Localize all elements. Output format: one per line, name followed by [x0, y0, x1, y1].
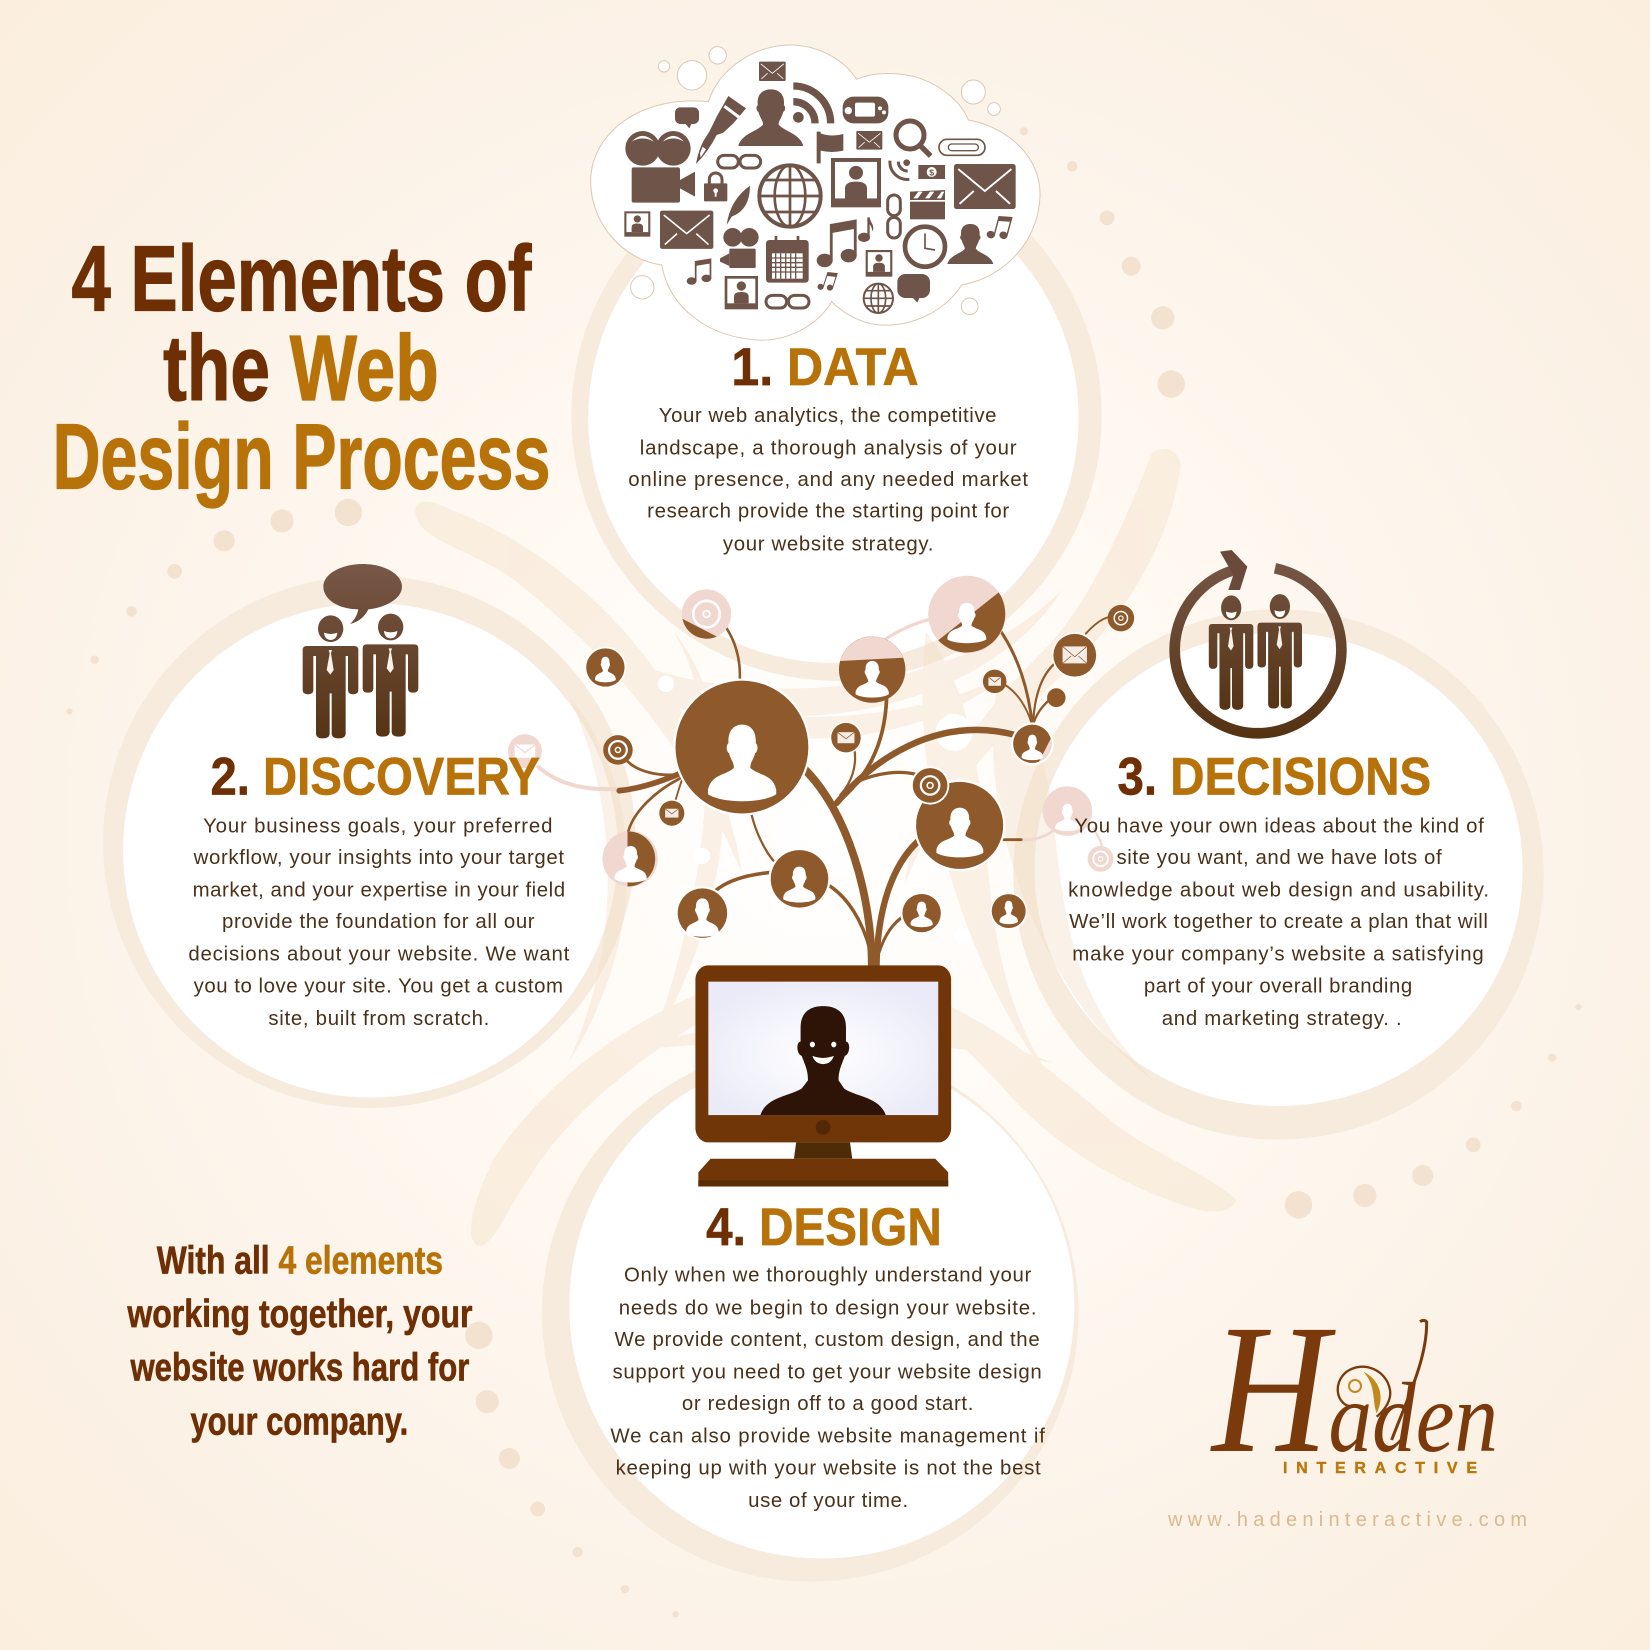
node: envelope left: [658, 799, 686, 827]
text block: data: online presence, and any needed market: [628, 469, 1028, 491]
node: person middle: [768, 848, 830, 910]
text block: design: keeping up with your website is not the best: [616, 1457, 1041, 1479]
icon: data cloud: [591, 45, 1040, 340]
icon: music notes: [687, 212, 1013, 293]
icon: portrait frames: [624, 158, 892, 309]
text block: decisions: [1068, 815, 1489, 1030]
icon: discovery businessmen with speech bubble: [303, 564, 418, 738]
swirl ornament and d flourish: [1338, 1320, 1427, 1440]
text block: discovery: site, built from scratch.: [268, 1008, 489, 1030]
speech bubble: [323, 564, 402, 624]
node: person centre top: [839, 636, 905, 703]
icon: clock: [905, 227, 945, 267]
background swirls: [415, 449, 1236, 1246]
man right: [363, 614, 418, 737]
node: target left: [603, 735, 633, 765]
panel: 4. design: [610, 1198, 1045, 1512]
heading: decisions: 3. DECISIONS: [1118, 747, 1431, 806]
closing statement: working together, your: [127, 1293, 472, 1336]
text block: data: research provide the starting point for: [647, 501, 1009, 523]
node: target top: [682, 589, 731, 639]
icon: monitor with person: [695, 965, 951, 1186]
pale white bubbles: [658, 676, 973, 944]
text block: discovery: provide the foundation for all our: [222, 911, 535, 933]
text block: decisions: part of your overall branding: [1144, 975, 1412, 997]
text block: discovery: market, and your expertise in your field: [193, 880, 565, 902]
text block: discovery: [188, 815, 570, 1030]
heading: discovery: 2. DISCOVERY: [210, 747, 540, 806]
panel: 1. data: [628, 338, 1028, 555]
text block: discovery: workflow, your insights into your target: [193, 847, 564, 869]
title: 4 Elements of: [72, 226, 532, 330]
title: the Web: [163, 316, 439, 420]
logo: haden interactive: [1167, 1287, 1527, 1531]
node: envelope centre: [830, 721, 862, 754]
node: pale envelope: [508, 734, 542, 768]
text block: design: Only when we thoroughly understand your: [624, 1265, 1031, 1287]
node: envelope small: [983, 670, 1006, 693]
text block: decisions: We’ll work together to create a plan that will: [1069, 911, 1488, 933]
text block: design: We provide content, custom design, and the: [615, 1329, 1040, 1351]
node: target top right: [1108, 605, 1134, 631]
branches: [619, 617, 1108, 966]
node: pale person: [1043, 786, 1092, 836]
text block: decisions: site you want, and we have lots of: [1116, 847, 1442, 869]
text block: data: [628, 405, 1028, 555]
text block: design: [610, 1265, 1045, 1512]
text block: data: landscape, a thorough analysis of your: [640, 438, 1017, 460]
pale branches: [537, 619, 1102, 850]
node: person right junction: [1011, 722, 1054, 765]
man left: [303, 615, 358, 738]
node: person lower left: [602, 831, 658, 887]
closing statement: With all 4 elements: [157, 1239, 443, 1282]
decorative rings and circles: [103, 150, 1544, 1582]
panel: 2. discovery: [188, 747, 570, 1030]
node: dot: [1047, 688, 1066, 707]
heading: design: 4. DESIGN: [706, 1198, 942, 1257]
node: person lower: [675, 886, 729, 940]
node: person low right: [900, 892, 943, 935]
text block: design: support you need to get your website design: [612, 1362, 1042, 1384]
text block: discovery: decisions about your website. We want: [188, 944, 570, 966]
node: large person: [673, 678, 811, 816]
text block: design: use of your time.: [748, 1490, 908, 1512]
closing statement: website works hard for: [130, 1347, 469, 1390]
node: person far right: [990, 893, 1027, 930]
node: pale target: [1088, 846, 1114, 872]
node: person upper left: [584, 646, 626, 689]
text block: data: your website strategy.: [723, 533, 933, 555]
calendar grid: [772, 253, 803, 279]
closing statement: your company.: [190, 1400, 408, 1443]
text block: discovery: you to love your site. You get a custom: [194, 975, 563, 997]
closing statement: [127, 1239, 472, 1443]
text block: discovery: Your business goals, your preferred: [203, 815, 552, 837]
node: target on large person: [911, 766, 949, 805]
wordmark: Haden: [1210, 1287, 1498, 1492]
tagline: INTERACTIVE: [1283, 1460, 1477, 1477]
website url: www.hadeninteractive.com: [1167, 1509, 1527, 1531]
heading: data: 1. DATA: [731, 338, 919, 397]
node: person right large: [914, 780, 1005, 871]
icon: decisions businessmen with circular arrow: [1175, 550, 1341, 733]
text block: design: needs do we begin to design your website.: [619, 1297, 1037, 1319]
title: [53, 226, 550, 508]
node: envelope top right: [1052, 632, 1098, 678]
panel: 3. decisions: [1068, 747, 1489, 1030]
text block: decisions: make your company’s website a satisfying: [1072, 944, 1484, 966]
text block: design: We can also provide website management if: [610, 1426, 1045, 1448]
text block: design: or redesign off to a good start.: [682, 1393, 973, 1415]
men: [1209, 594, 1302, 710]
text block: decisions: You have your own ideas about the kind of: [1074, 815, 1484, 837]
text block: decisions: and marketing strategy. .: [1162, 1008, 1402, 1030]
text block: data: Your web analytics, the competitive: [659, 405, 997, 427]
node: person top right: [928, 576, 1006, 653]
illustration: people network tree: [508, 576, 1134, 966]
text block: decisions: knowledge about web design and usability.: [1068, 880, 1489, 902]
title: Design Process: [53, 404, 550, 508]
dollar sign: $: [929, 167, 934, 177]
